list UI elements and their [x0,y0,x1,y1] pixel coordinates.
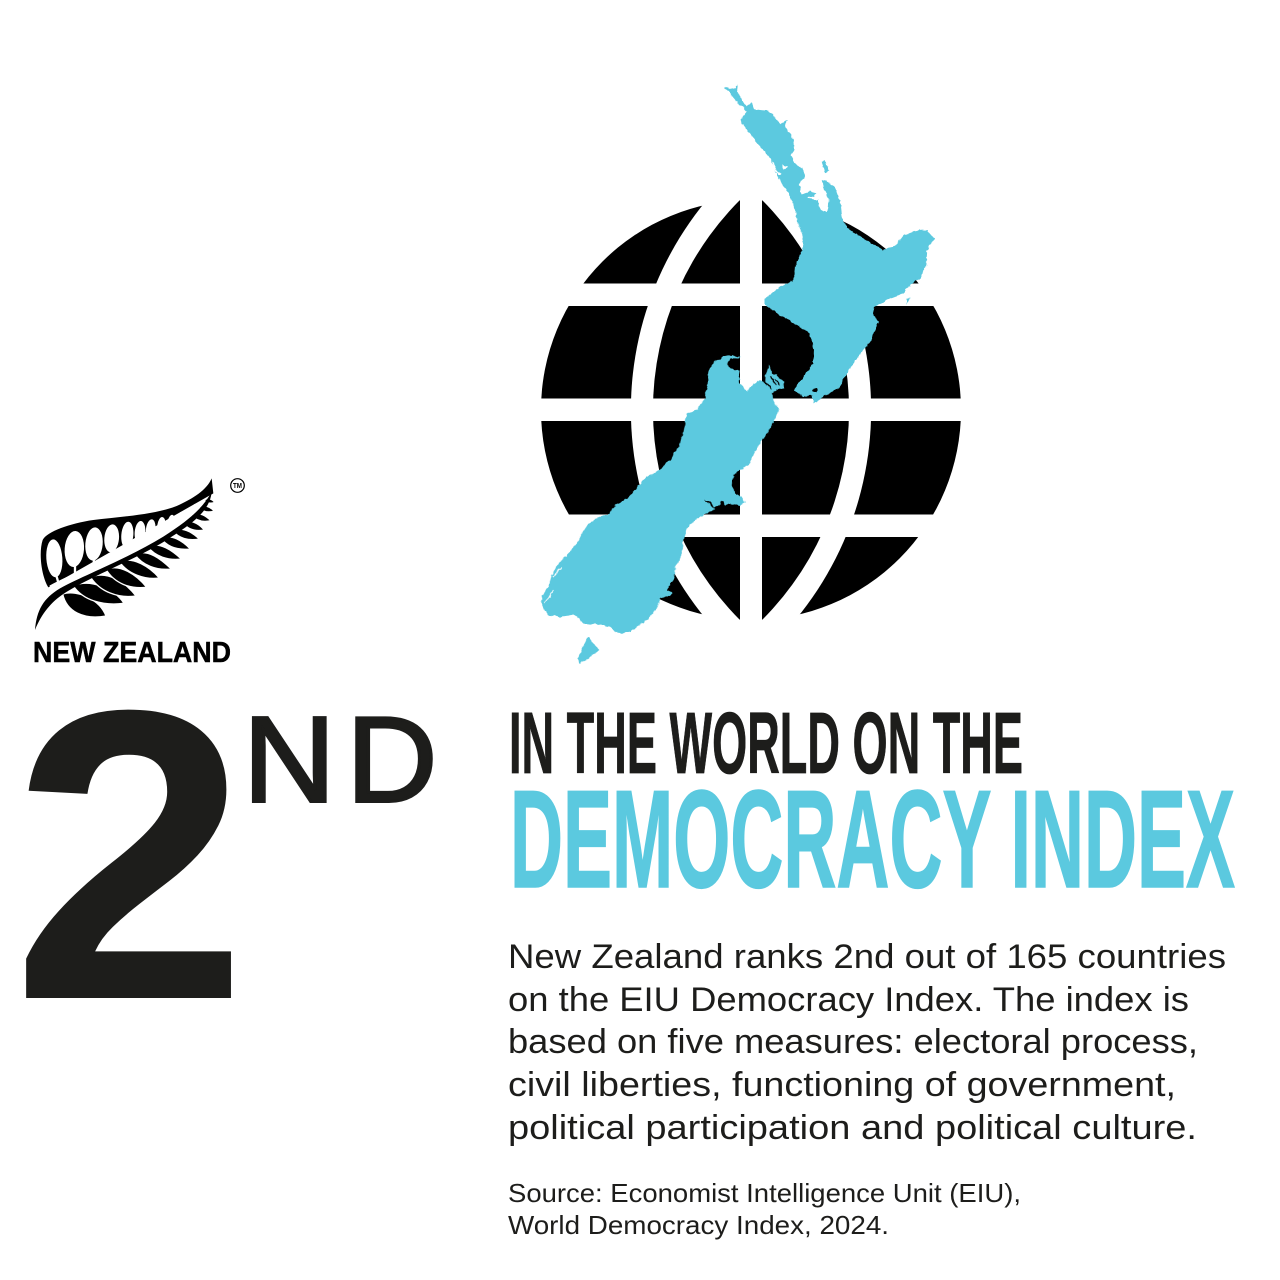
body paragraph: based on five measures: electoral process, [508,1023,1198,1061]
body paragraph: on the EIU Democracy Index. The index is [508,981,1189,1019]
logo wordmark: NEW ZEALAND [33,637,231,669]
map: North Island [725,85,934,403]
big rank: 2nd [11,624,437,1086]
big rank: 2nd: 2 [11,624,248,1086]
body paragraph: New Zealand ranks 2nd out of 165 countries [508,938,1226,976]
source note: Source: Economist Intelligence Unit (EIU), [508,1178,1021,1208]
big rank: 2nd: D [346,692,437,828]
icon: silver fern [35,478,215,630]
icon: trademark symbol [231,479,244,492]
map: Great Barrier Island [822,160,829,173]
body paragraph [508,938,1226,1147]
source note: World Democracy Index, 2024. [508,1210,889,1240]
map: New Zealand in blue [542,85,934,663]
heading [509,695,1235,917]
body paragraph: civil liberties, functioning of government, [508,1066,1176,1104]
big rank: 2nd: N [243,691,336,828]
source note [508,1178,1021,1240]
body paragraph: political participation and political culture. [508,1109,1197,1147]
map: Mahia Peninsula [906,298,911,305]
map: Stewart Island [578,637,599,663]
map: South Island [542,355,784,663]
icon: trademark symbol: TM [233,483,242,490]
logo: silver fern with New Zealand wordmark [33,478,244,669]
icon: black globe with white grid lines [541,200,961,620]
